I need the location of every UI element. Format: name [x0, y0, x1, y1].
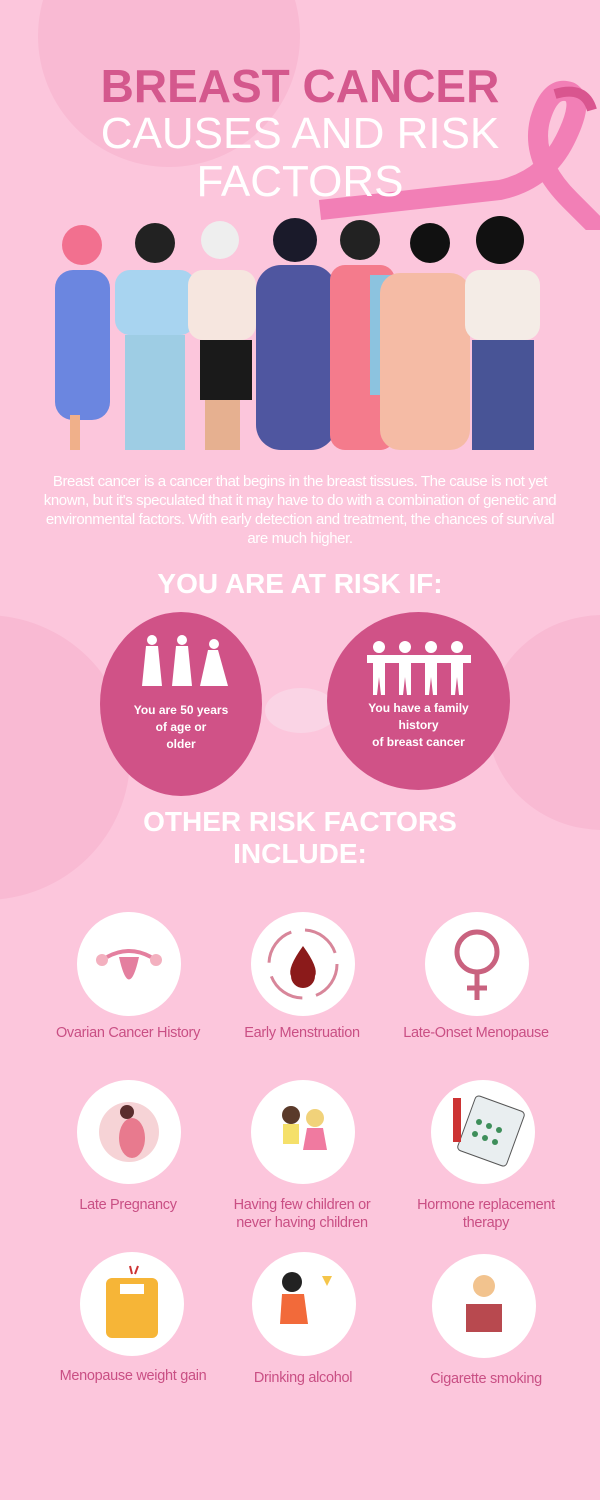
label: Drinking alcohol — [254, 1370, 352, 1386]
heading: other risk factors: INCLUDE: — [233, 838, 367, 869]
illustration: group of women — [55, 216, 540, 450]
title — [101, 60, 499, 206]
panel: family history — [327, 612, 510, 790]
icon: ovary — [77, 912, 181, 1016]
ribbon — [318, 80, 600, 230]
label: Hormone replacement therapy — [417, 1197, 555, 1231]
title: CAUSES AND RISK — [101, 109, 499, 158]
panel: family history: You have a family — [368, 701, 469, 715]
panel: age 50: older — [166, 737, 196, 751]
label: Cigarette smoking — [430, 1371, 542, 1387]
title: BREAST CANCER — [101, 60, 499, 112]
panel: age 50 — [100, 612, 262, 796]
heading: you are at risk if: YOU ARE AT RISK IF: — [157, 568, 443, 599]
icon: smoking woman — [432, 1254, 536, 1358]
icon: drinking woman — [252, 1252, 356, 1356]
label: Late Pregnancy — [79, 1197, 177, 1213]
panel: family history: history — [398, 718, 438, 732]
title: FACTORS — [196, 157, 404, 206]
icon: blood drop — [251, 912, 355, 1016]
heading: other risk factors — [143, 806, 457, 869]
panel: family history: of breast cancer — [372, 735, 465, 749]
icon: children — [251, 1080, 355, 1184]
panel: age 50: of age or — [156, 720, 206, 734]
intro paragraph: Breast cancer is a cancer that begins in the breast tissues. The cause is not yet known, but it's speculated that it may have to do with a combination of genetic and environmental factors. With early detection and treatment, the chances of survival are much higher. — [44, 473, 556, 547]
icon: elderly people — [142, 635, 228, 686]
label: Early Menstruation — [244, 1025, 360, 1041]
icon: clock female — [425, 912, 529, 1016]
label: Having few children or never having children — [234, 1197, 370, 1231]
panel: age 50: You are 50 years — [134, 703, 228, 717]
icon: scale — [80, 1252, 184, 1356]
label: Menopause weight gain — [60, 1368, 206, 1384]
heading: other risk factors: OTHER RISK FACTORS — [143, 806, 457, 837]
icon: paper chain people — [367, 641, 471, 695]
label: Late-Onset Menopause — [403, 1025, 549, 1041]
connector blob — [265, 688, 337, 733]
icon: pregnancy — [77, 1080, 181, 1184]
icon: pills — [431, 1080, 535, 1184]
label: Ovarian Cancer History — [56, 1025, 200, 1041]
